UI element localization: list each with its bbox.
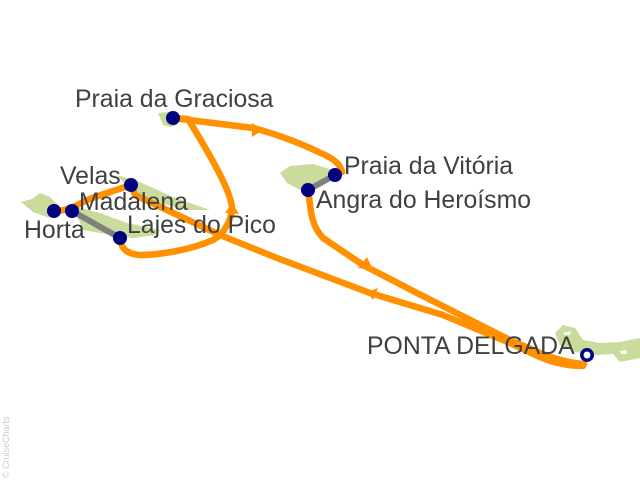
label: Ponta Delgada: PONTA DELGADA [367,333,575,360]
grey transfer lines [72,175,335,238]
route: Praia da Graciosa to Praia da Vitória [173,118,342,175]
marker: Lajes do Pico [113,231,127,245]
label: Velas: Velas [60,163,121,190]
island: Graciosa [158,112,180,127]
marker: Horta [47,204,61,218]
marker: Ponta Delgada home port [582,350,592,360]
label: Horta: Horta [24,217,85,244]
label: Angra do Heroísmo: Angra do Heroísmo [316,187,531,214]
island: Faial [21,193,66,218]
arrow: towards Ponta Delgada [358,257,373,270]
arrow: towards Velas [367,288,378,300]
route: Velas to Horta [54,185,131,211]
marker: Praia da Vitória [328,168,342,182]
island: Pico [77,207,160,238]
label: Lajes do Pico: Lajes do Pico [127,212,276,239]
transfer: Angra to Praia da Vitória [308,175,335,190]
marker: Angra do Heroísmo [301,183,315,197]
port labels [24,86,575,360]
marker: Velas [124,178,138,192]
route: Lajes do Pico to Praia da Graciosa [120,118,232,255]
direction arrows [225,123,378,300]
label: Madalena: Madalena [79,189,188,216]
island: São Miguel [555,325,640,362]
marker: Madalena [65,204,79,218]
arrow: towards Praia da Vitória [252,123,263,137]
arrow: towards Graciosa [225,203,239,214]
route: Ponta Delgada to Velas [131,185,583,366]
transfer: Madalena to Lajes do Pico [72,211,120,238]
islands [21,112,640,362]
label: Praia da Graciosa: Praia da Graciosa [75,86,274,113]
port markers [47,111,342,245]
orange cruise route [54,118,584,366]
credit: CruiseCharts: © CruiseCharts [1,416,11,478]
island: Terceira [280,164,336,190]
island: São Jorge [117,175,210,210]
label: Praia da Vitória: Praia da Vitória [344,153,513,180]
route: Ponta Delgada to Angra do Heroísmo [308,190,584,364]
marker: Praia da Graciosa [166,111,180,125]
